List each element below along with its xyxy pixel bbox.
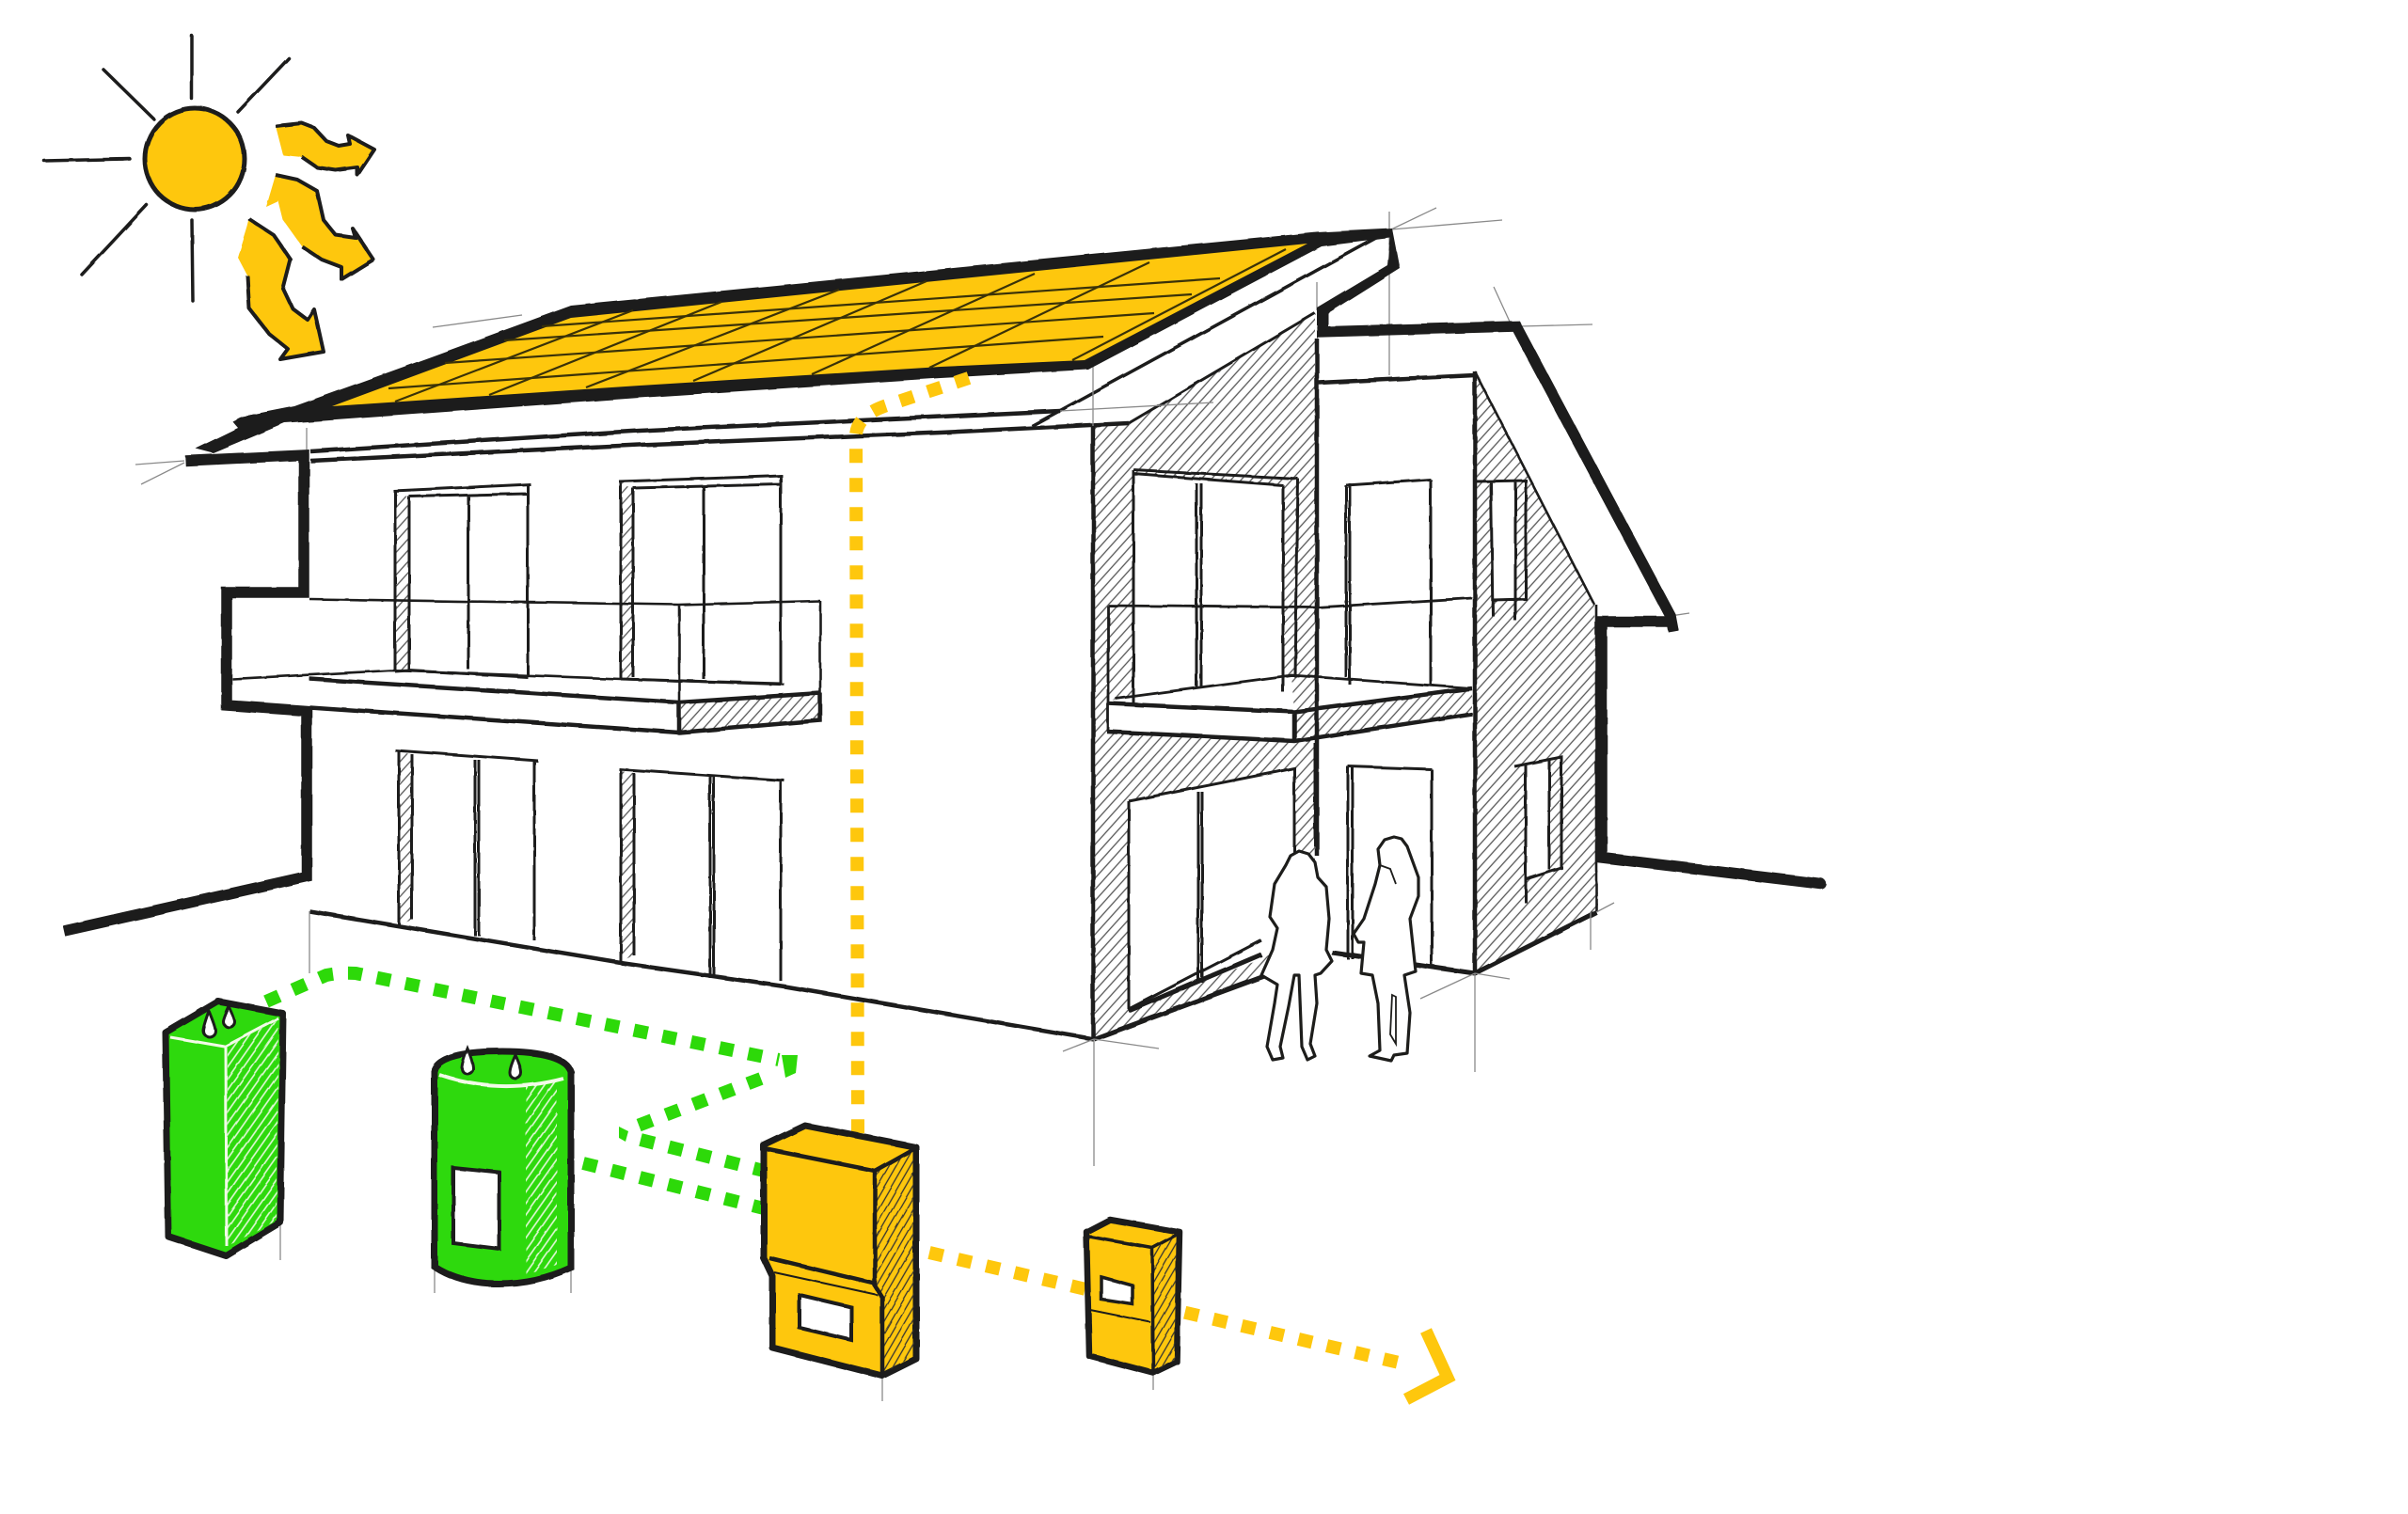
door: recess lower [1348, 766, 1432, 966]
window: lower left [395, 750, 538, 940]
window: recess upper [1346, 480, 1431, 685]
window: upper right [619, 475, 783, 684]
dark outline walls [64, 326, 1821, 931]
roof frame [196, 229, 1400, 453]
yellow dashed line: roof to inverter [856, 378, 969, 1134]
figure: woman left [1261, 851, 1332, 1060]
green cylinder storage tank [435, 1049, 571, 1284]
building outlines [309, 238, 1596, 1039]
sun [44, 36, 289, 301]
front windows [393, 470, 1561, 1009]
electricity meter [1086, 1220, 1180, 1373]
solar panel grid [388, 249, 1286, 402]
sunlight arrows [238, 123, 374, 359]
right balcony [1107, 598, 1472, 741]
green box battery [166, 1001, 283, 1255]
arrow: top sunbeam [276, 123, 374, 175]
inverter [764, 1126, 916, 1376]
window: upper left [393, 483, 531, 677]
window: side upper [1133, 470, 1298, 706]
window: gable [1475, 481, 1526, 621]
roof with solar panels [196, 229, 1400, 453]
green dashed lines: batteries to inverter [266, 973, 798, 1208]
window: lower right [619, 769, 784, 981]
left balcony [232, 599, 820, 733]
arrow: middle sunbeam [266, 175, 373, 279]
window: side lower [1514, 757, 1561, 903]
figure: woman right [1354, 837, 1418, 1061]
side window and balcony cutouts [1107, 474, 1549, 1009]
arrowhead [1406, 1331, 1448, 1399]
wall hatching [395, 313, 1598, 1039]
solar panel surface [332, 244, 1307, 406]
window: side ground floor [1129, 743, 1315, 1009]
yellow dashed line: inverter to grid [929, 1253, 1411, 1365]
construction lines [135, 208, 1689, 1401]
arrow: lower sunbeam [238, 219, 324, 359]
